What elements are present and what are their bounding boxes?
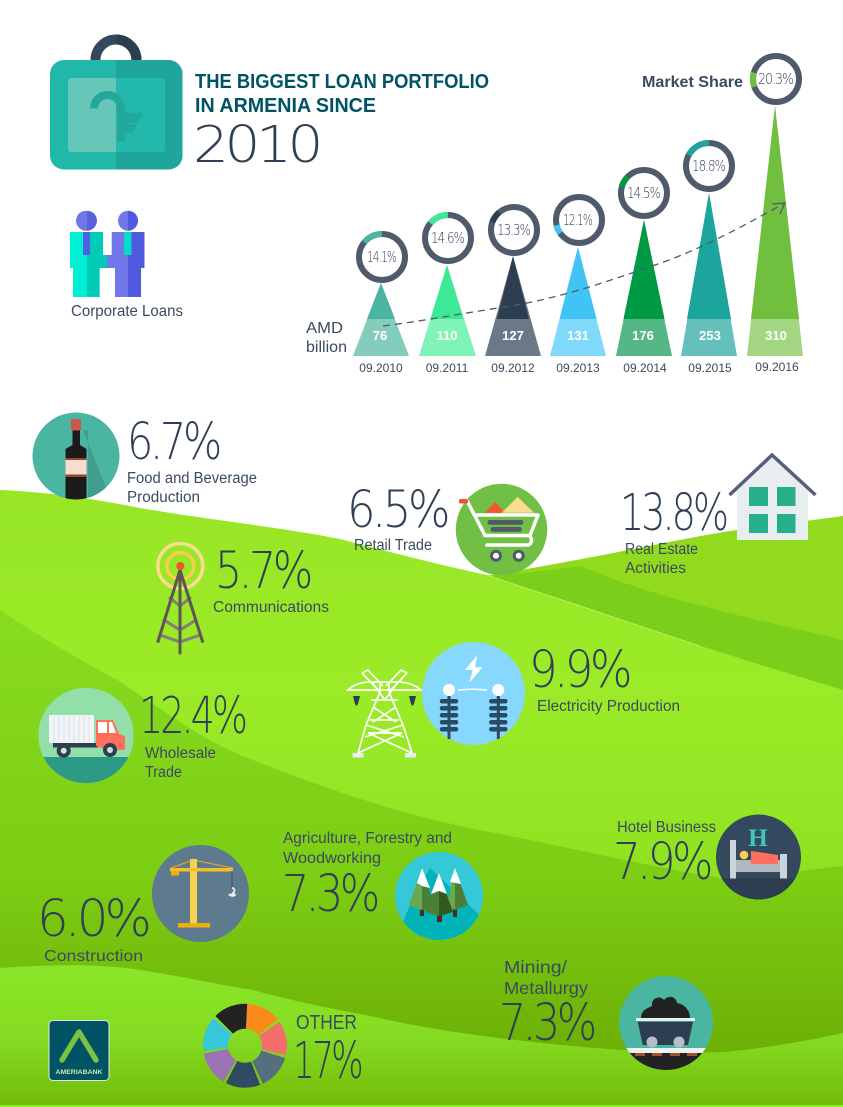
label: corporate loans: Corporate Loans [71,303,183,320]
sector: construction: Construction [44,948,143,965]
bar 2016 [747,50,805,374]
sector: wholesale trade: Trade [145,764,182,781]
arrow: growth trend [383,203,785,326]
label: market share: Market Share [642,74,743,91]
title: 2010 [193,116,319,175]
bar 2015: 253 [699,328,721,343]
sector: real estate: Real Estate [625,541,698,558]
icon: wine bottle [32,412,120,500]
icon: two business people [70,211,144,297]
title: THE BIGGEST LOAN PORTFOLIO [195,70,489,93]
bar 2016: 310 [765,328,787,343]
title: IN ARMENIA SINCE [195,94,376,117]
sector: hotel business: 7.9% [613,833,710,892]
sector: real estate: 13.8% [620,484,726,543]
sector: retail trade [347,481,547,575]
label: AMD billion: AMD [306,320,343,337]
icon: truck [38,688,134,784]
bar chart: triangular bars with market share rings [350,50,805,375]
sector: food and beverage: Food and Beverage [127,470,257,487]
bar 2016: 09.2016 [755,360,799,374]
title [193,70,489,175]
bar 2011: 14.6% [431,229,465,247]
sector: mining and metallurgy: 7.3% [499,994,594,1053]
bar 2012: 09.2012 [491,361,535,375]
sector: other: OTHER [296,1012,357,1034]
sector: electricity production: Electricity Production [537,698,680,715]
icon: radio tower [158,544,203,653]
sector: communications: Communications [213,599,329,616]
sector: construction [37,845,249,965]
icon: segmented ring [203,1004,287,1087]
sector: communications: 5.7% [215,542,310,601]
sector: agriculture [283,832,483,940]
sector: food and beverage: Production [127,489,200,506]
sector: other: 17% [293,1032,361,1091]
sector: other [203,1004,361,1091]
bar 2012 [485,201,543,375]
sector: food and beverage [32,412,257,510]
icon: briefcase [50,39,183,169]
sector: retail trade: Retail Trade [354,537,432,554]
icon: hotel bed: H [748,825,768,852]
bar 2013: 12.1% [563,211,593,229]
bar 2014: 176 [632,328,654,343]
label: AMD billion: billion [306,339,347,356]
sector: wholesale trade: Wholesale [145,745,216,762]
bar 2011 [416,206,480,375]
sector: mining and metallurgy: Metallurgy [504,978,588,998]
sector: real estate: Activities [625,560,686,577]
bar 2014 [616,165,672,375]
icon: shopping cart [456,484,547,575]
sector: electricity production: 9.9% [529,641,629,700]
bar 2013 [547,188,611,375]
logo: Ameriabank: AMERIABANK [56,1069,103,1076]
icon: mine cart [619,976,713,1070]
sector: retail trade: 6.5% [347,481,447,540]
bar 2015 [678,135,740,375]
icon: pylon [348,670,421,753]
bar 2010: 76 [373,328,387,343]
icon: house [730,455,816,540]
sector: electricity production [348,641,680,758]
bar 2011: 09.2011 [426,361,469,375]
sector: hotel business [613,814,801,900]
bar 2012: 13.3% [497,221,531,239]
label: AMD billion [306,320,347,356]
sector: real estate [620,455,816,577]
sector: construction: 6.0% [37,890,149,949]
bar 2010 [350,225,414,375]
background: green hills [0,490,843,1107]
bar 2014: 09.2014 [623,361,667,375]
bar 2010: 14.1% [367,248,397,266]
sector: agriculture: Woodworking [283,850,381,867]
sector: mining and metallurgy [499,957,717,1073]
bar 2013: 131 [567,328,589,343]
bar 2013: 09.2013 [556,361,600,375]
sector: hotel business: Hotel Business [617,819,716,836]
icon: trees [395,852,483,940]
sector: wholesale trade [30,687,245,787]
icon: power insulators [422,642,525,745]
bar 2011: 110 [437,328,457,343]
logo: Ameriabank [49,1020,109,1080]
bar 2010: 09.2010 [359,361,403,375]
sector: wholesale trade: 12.4% [139,687,245,746]
bar 2016: 20.3% [758,70,794,88]
bar 2014: 14.5% [627,184,661,202]
bar 2015: 18.8% [692,157,726,175]
sector: food and beverage: 6.7% [127,413,219,472]
bar 2012: 127 [502,328,524,343]
sector: agriculture: 7.3% [282,865,377,924]
icon: crane [152,845,249,942]
sector: mining and metallurgy: Mining/ [504,957,567,977]
icon: hotel bed [716,814,801,900]
bar 2015: 09.2015 [688,361,732,375]
sector: agriculture: Agriculture, Forestry and [283,830,452,847]
sector: communications [158,542,329,653]
